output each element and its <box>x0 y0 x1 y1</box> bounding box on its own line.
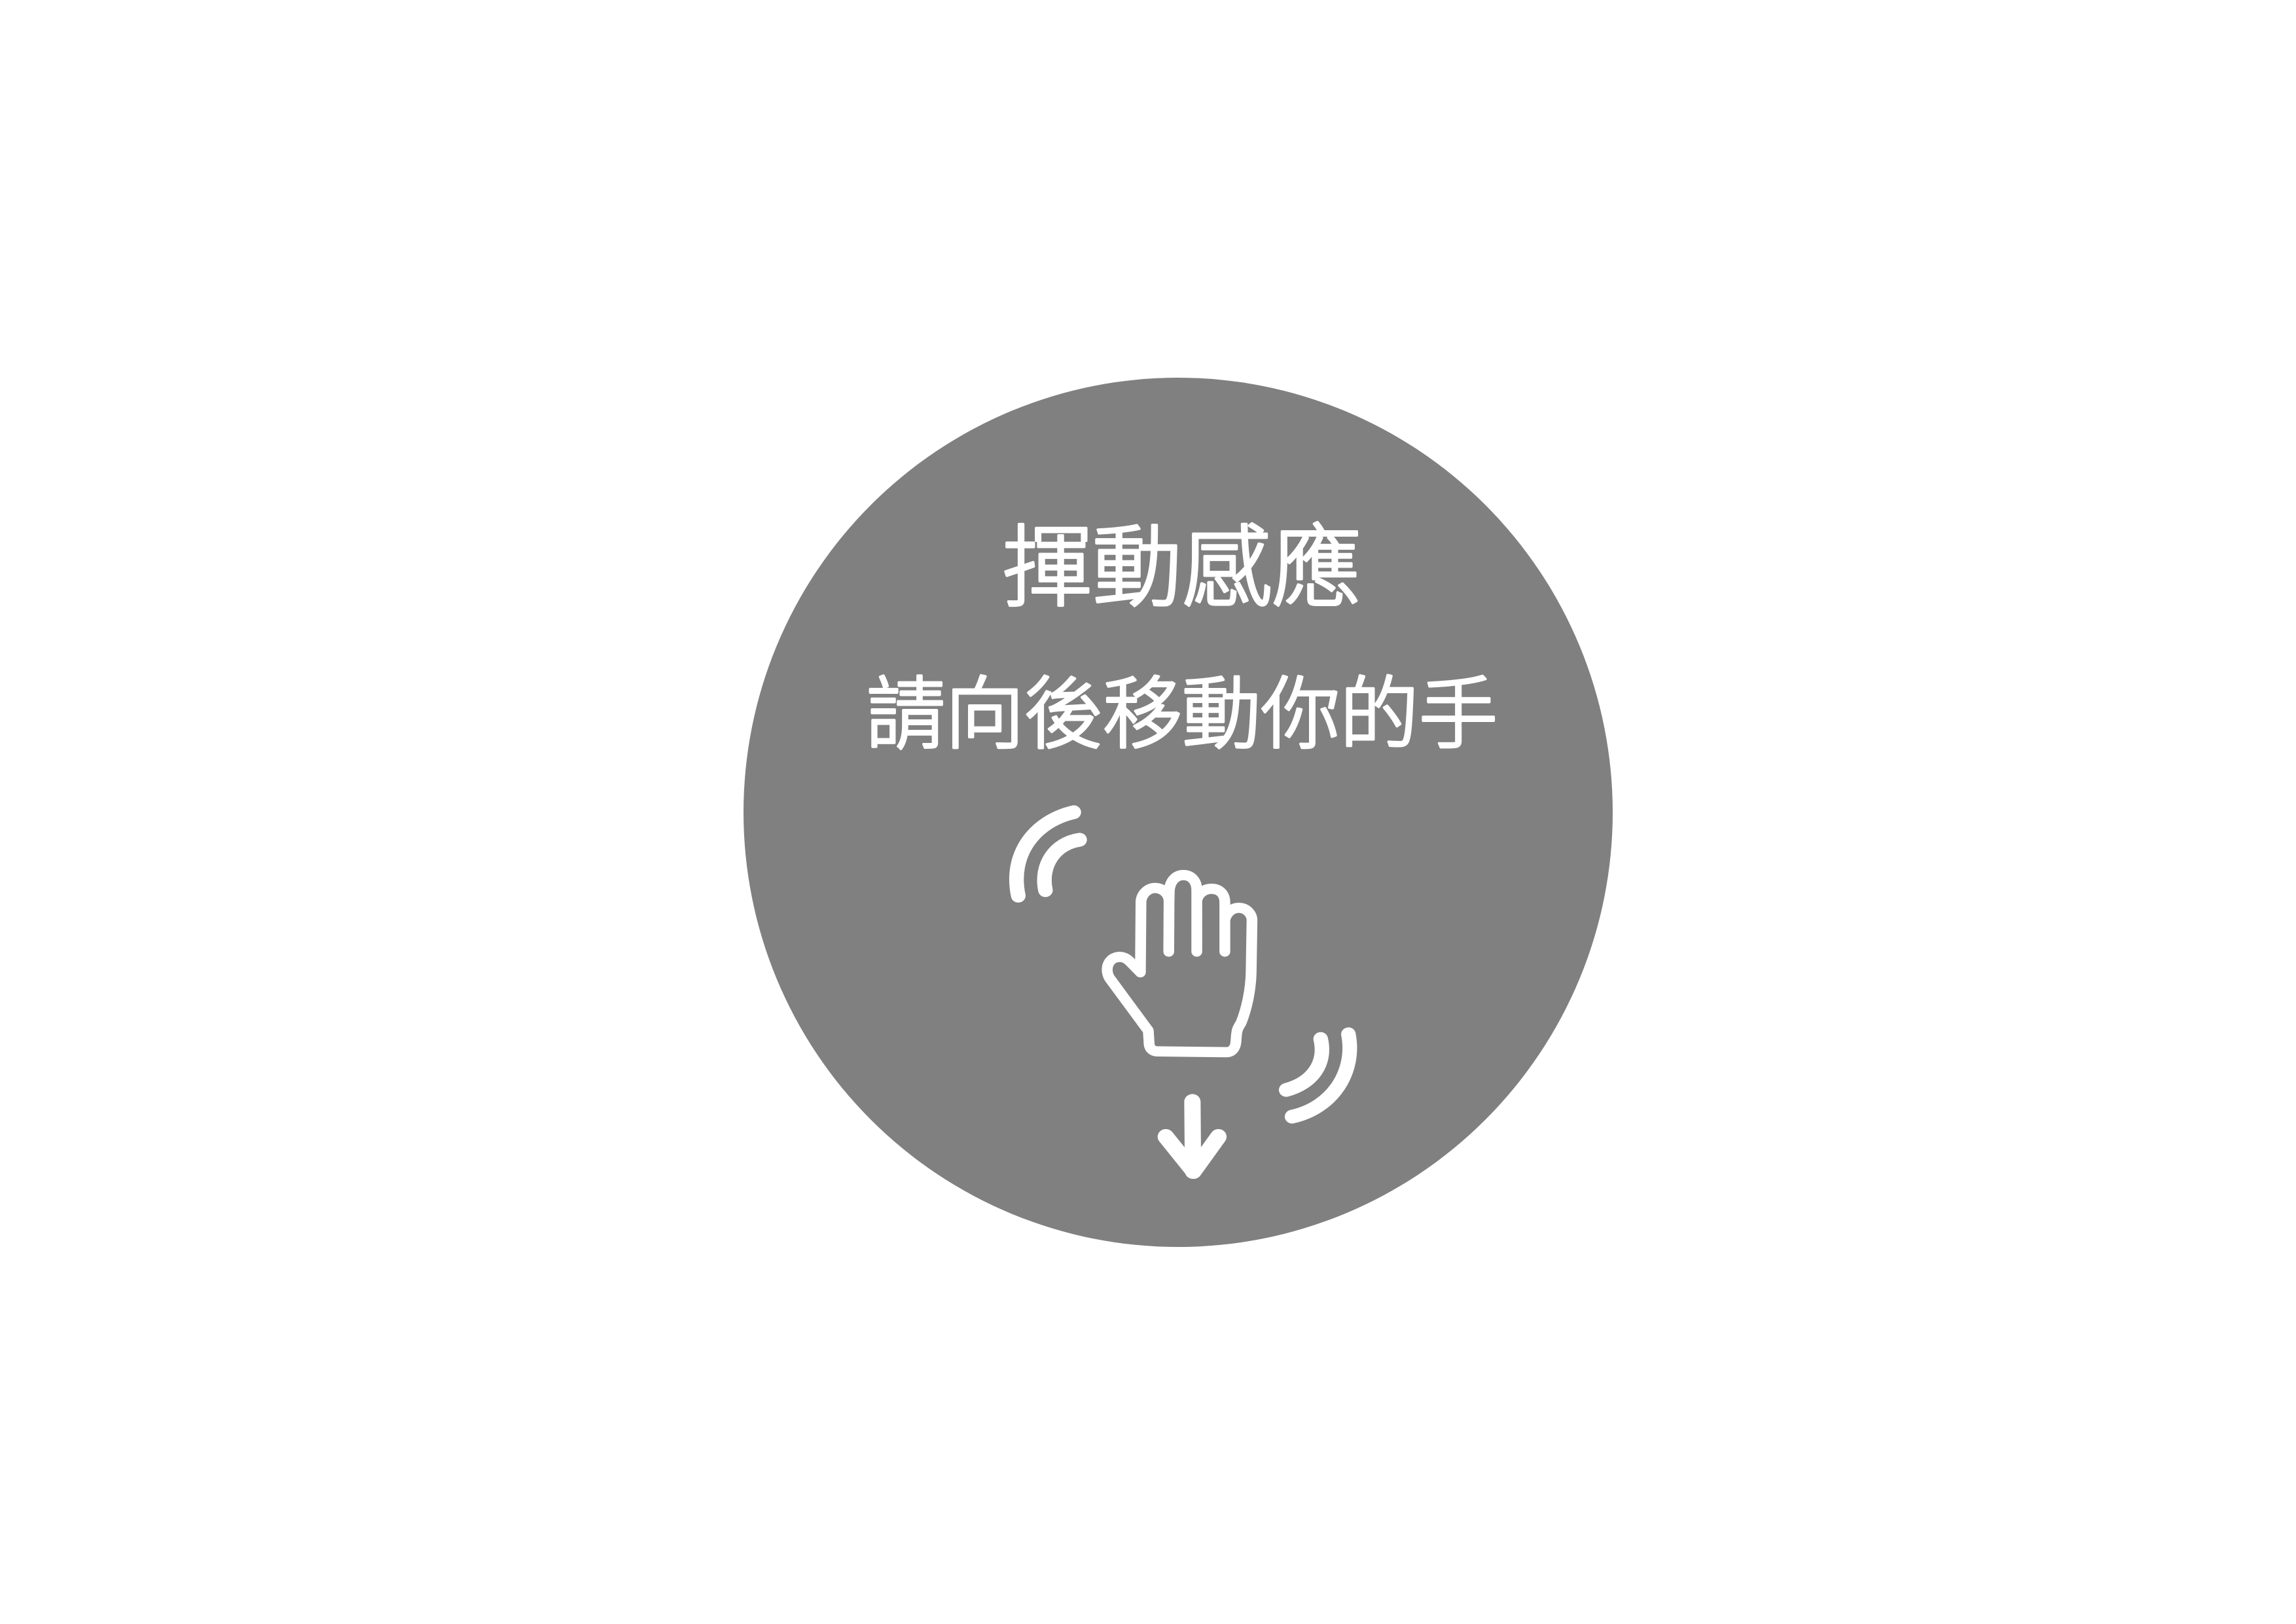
icon: waving hand with motion arcs and arrow <box>1016 812 1350 1171</box>
icon: lower-right motion arcs <box>1286 1034 1350 1117</box>
panel: grey circle <box>744 378 1613 1247</box>
icon: hand outline <box>1107 875 1252 1052</box>
arrow: move down <box>1166 1102 1219 1171</box>
icon: upper-left motion arcs <box>1016 812 1080 895</box>
heading: gesture sensing: 揮動感應 <box>1003 518 1361 619</box>
instruction text: 請向後移動你的手 <box>867 670 1498 759</box>
